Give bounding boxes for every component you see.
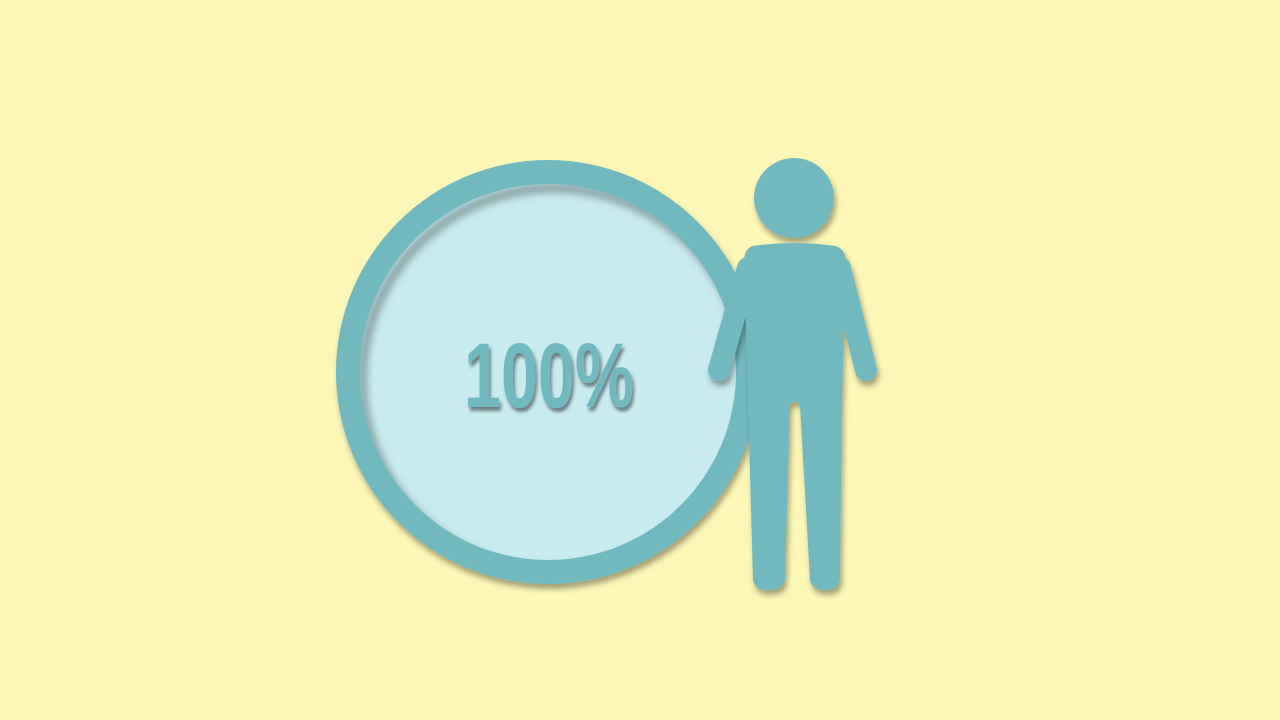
chart: percentage ring	[336, 160, 760, 584]
percentage label: 100%	[464, 325, 634, 427]
icon: person	[719, 158, 866, 590]
